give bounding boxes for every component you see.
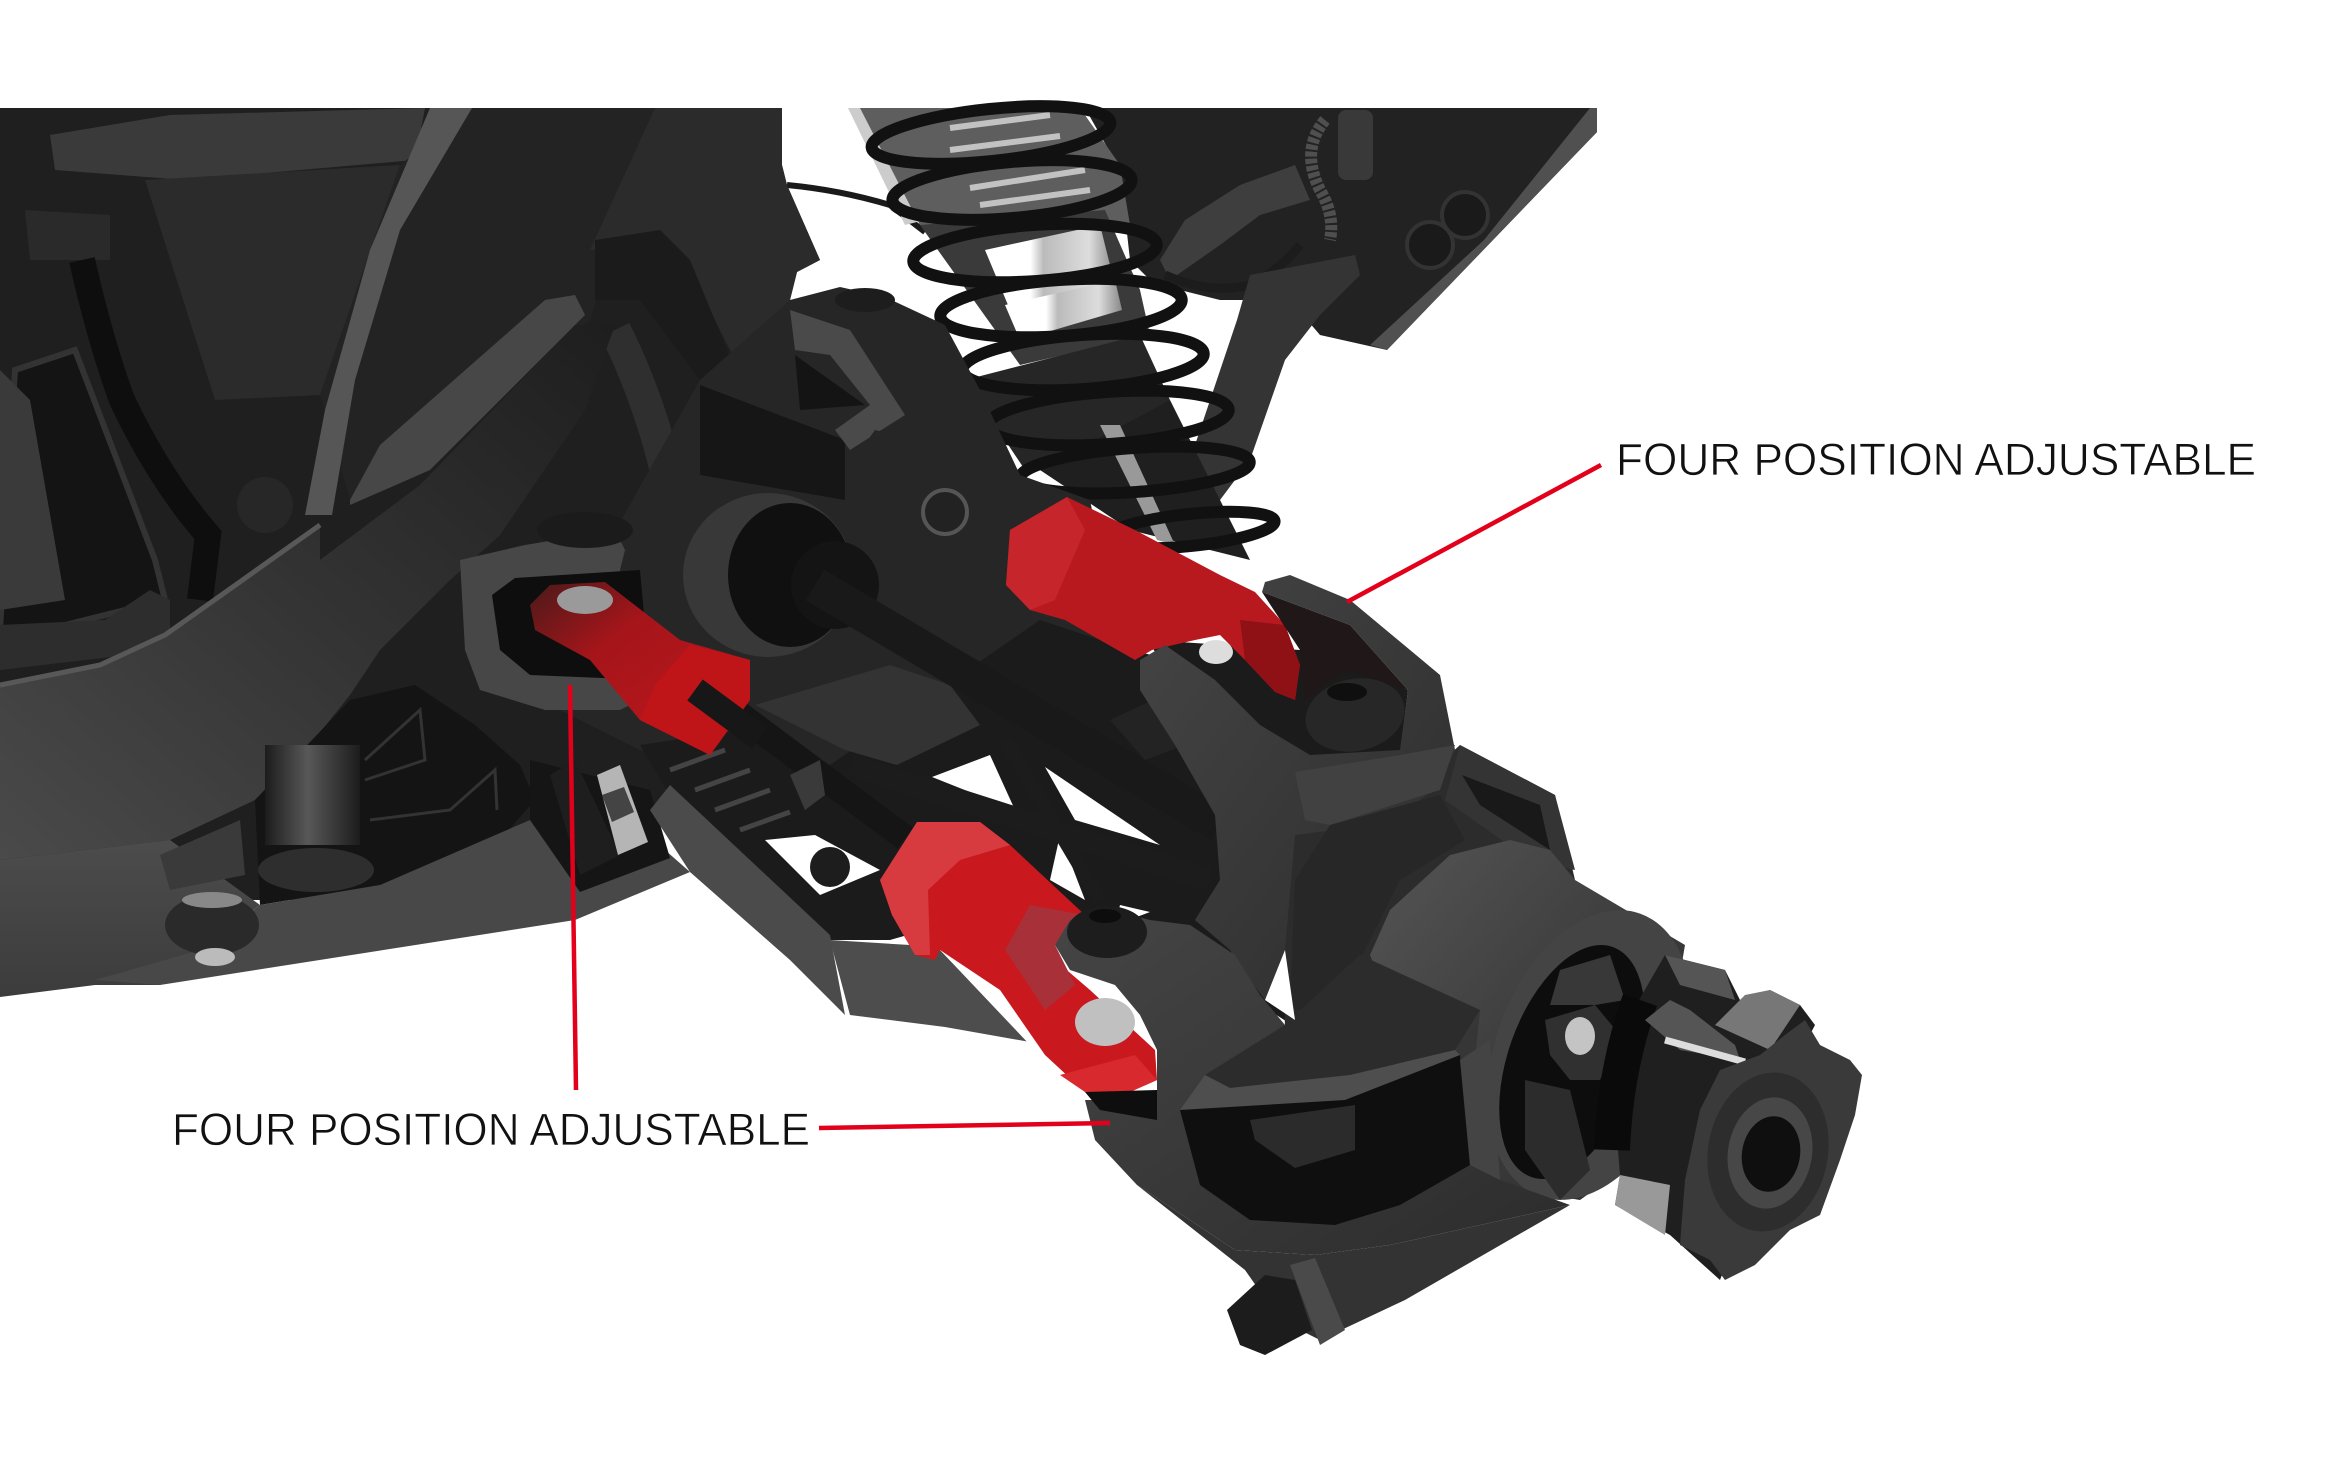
center gearbox <box>540 287 1130 800</box>
box screw <box>237 477 293 533</box>
left cavity <box>0 350 165 630</box>
battery box front <box>145 165 400 400</box>
main sweeping band <box>0 325 615 860</box>
wire clip <box>25 210 110 260</box>
wheel nut <box>1680 1020 1862 1280</box>
back bracket <box>1280 745 1575 1030</box>
lower rod <box>700 685 905 838</box>
wires <box>82 260 208 600</box>
left clevis <box>460 512 650 710</box>
lower A-arm frame <box>640 620 1310 1045</box>
long upper rod <box>815 585 1220 825</box>
label: lower callout: FOUR POSITION ADJUSTABLE <box>172 1104 810 1155</box>
lower screw <box>1067 906 1147 958</box>
collar <box>1295 745 1455 825</box>
post <box>265 745 360 845</box>
red rod end upper <box>1006 497 1300 700</box>
lower red rod end <box>880 822 1157 1092</box>
neck <box>1290 795 1465 1010</box>
grey ring <box>1160 165 1310 280</box>
knuckle window <box>1180 1055 1470 1225</box>
hinge pin and nut <box>1137 1185 1570 1355</box>
upper right chassis plate <box>1085 108 1597 530</box>
battery box lid <box>50 108 425 180</box>
knuckle opening <box>1262 592 1408 700</box>
wire behind shock <box>787 185 925 232</box>
light strip <box>305 108 472 515</box>
lower screw post <box>160 820 259 966</box>
shock absorber <box>848 97 1276 560</box>
grey strut <box>1160 255 1360 530</box>
backing behind upper red end <box>1150 640 1408 760</box>
dark under red <box>1085 1090 1157 1120</box>
axle carrier <box>1370 840 1730 1228</box>
chrome bushing <box>550 760 620 875</box>
dark arm <box>700 385 845 500</box>
ring <box>683 493 853 657</box>
red rod end left <box>530 582 760 755</box>
knuckle gap <box>1265 950 1295 1020</box>
backing under bushing <box>530 760 670 892</box>
hex link <box>850 430 1005 550</box>
upper knuckle <box>1140 575 1465 1010</box>
upper right column <box>590 108 820 395</box>
left chassis body <box>0 108 820 997</box>
dark recess <box>255 685 535 905</box>
leader line: left clevis <box>570 685 576 1090</box>
rod nut <box>1110 690 1185 760</box>
upper screw <box>1299 669 1411 761</box>
hex on rod <box>790 760 825 810</box>
lower panel <box>0 840 260 997</box>
grey triangular frame <box>790 310 905 450</box>
lower knuckle <box>1055 906 1570 1255</box>
hex driver <box>1610 955 1815 1280</box>
cross bars <box>850 740 1210 900</box>
leader line: upper right <box>1347 465 1601 602</box>
label: upper callout: FOUR POSITION ADJUSTABLE <box>1616 434 2256 485</box>
leader line: lower <box>819 1123 1110 1128</box>
bottom strip <box>95 780 690 985</box>
